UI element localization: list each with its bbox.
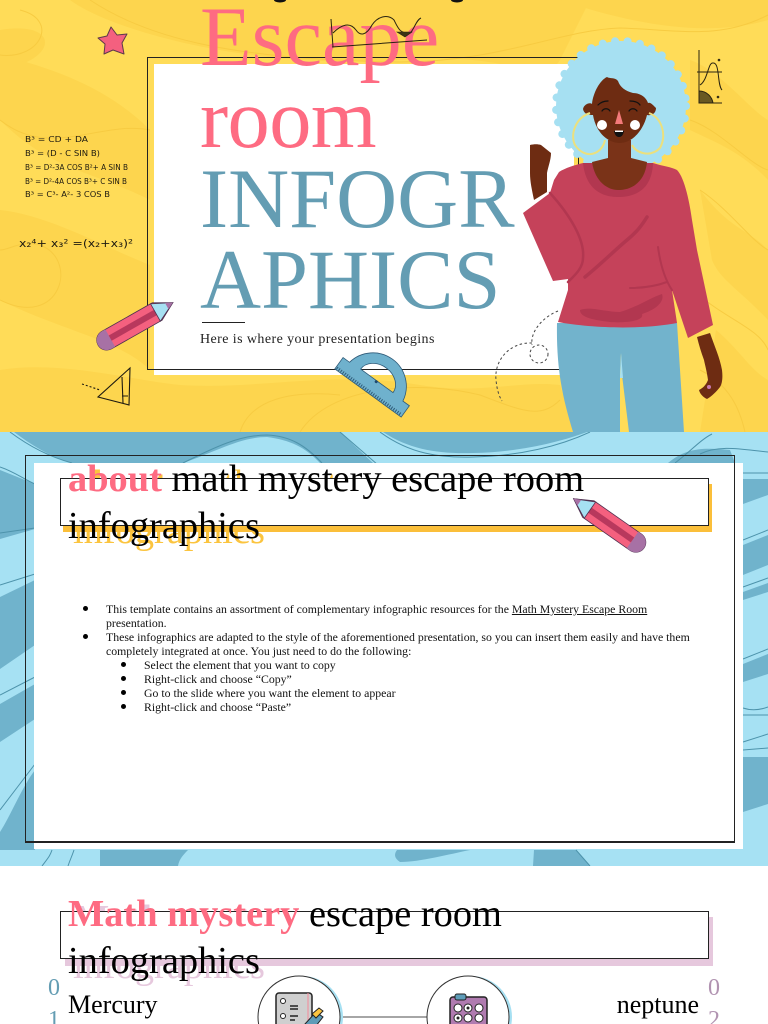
heading shadow text: infographics (73, 510, 265, 552)
pants highlight (620, 353, 623, 378)
icon: pencil (572, 498, 646, 553)
number 02 (708, 975, 720, 1024)
icon circle 2 (426, 976, 512, 1024)
heading box (60, 911, 709, 959)
formulas block: B³ = D²-4A COS B³+ C SIN B (25, 177, 127, 186)
slide 2: about (0, 432, 768, 866)
title: Escape room: room (200, 73, 376, 166)
formulas block: B³ = CD + DA (25, 135, 89, 144)
label: neptune: neptune (617, 990, 699, 1019)
heading: infographics (68, 940, 260, 982)
bullet 2: Right-click and choose “Paste” (144, 700, 291, 714)
bullet 1: presentation. (106, 616, 167, 630)
fist (530, 144, 551, 200)
slide 1: title cover (0, 0, 768, 432)
ring (707, 385, 711, 389)
icon: protractor (334, 352, 410, 418)
subtitle: Here is where your presentation begins (200, 332, 435, 347)
sweater shading (550, 193, 672, 322)
cropped descenders at top edge (274, 0, 463, 2)
face details (597, 101, 640, 137)
dashed loop (495, 310, 558, 402)
arm and hand right (697, 333, 722, 399)
blue wavy background (0, 432, 768, 866)
bullet 2: These infographics are adapted to the style of the aforementioned presentation, so you can insert them easily and have them (106, 630, 690, 644)
heading (68, 893, 502, 982)
title: Infographics (200, 153, 515, 327)
bullet 2: Right-click and choose “Copy” (144, 672, 292, 686)
earrings (573, 113, 663, 154)
number 01: 0 (48, 975, 60, 1001)
heading shadow text: about math mystery escape room (73, 463, 589, 505)
connector line (343, 1016, 426, 1018)
icon: chart over title (330, 16, 427, 48)
bullet text (83, 602, 690, 714)
number 01 (48, 975, 60, 1024)
pants (557, 323, 684, 432)
heading shadow text (73, 463, 589, 552)
bullet 2: Select the element that you want to copy (144, 658, 336, 672)
sweater (523, 163, 713, 338)
icon: pencil left (96, 302, 174, 350)
icon circle 1 (258, 976, 343, 1024)
formulas block: B³ = (D - C SIN B) (25, 149, 100, 158)
head (583, 77, 656, 143)
icon: chart right (697, 50, 722, 104)
heading shadow text: Math mystery escape room (73, 898, 507, 940)
heading shadow box (63, 484, 712, 532)
divider rule (202, 322, 245, 323)
white panel (34, 463, 743, 849)
title: Infographics: INFOGR (200, 153, 515, 246)
bullet 1 (106, 602, 716, 630)
hair (556, 41, 686, 171)
heading: infographics (68, 504, 260, 546)
formulas block: B³ = C³- A²- 3 COS B (25, 190, 110, 199)
yellow wavy background (0, 0, 768, 432)
character: woman with blue afro (523, 37, 722, 432)
heading (68, 458, 584, 546)
collar (583, 163, 653, 197)
heading shadow box (65, 917, 713, 966)
formulas block: x₂⁴+ x₃² =(x₂+x₃)² (19, 237, 133, 250)
neck (592, 140, 647, 190)
heading: Math mystery escape room (68, 893, 502, 935)
slide 3: infographic (0, 866, 768, 1024)
bullet 2 (106, 630, 716, 714)
black frame (147, 57, 579, 370)
number 02: 0 (708, 975, 720, 1001)
icon: triangle (82, 366, 131, 406)
heading shadow text (73, 898, 507, 986)
icon: star (98, 26, 128, 54)
heading: about math mystery escape room (68, 458, 584, 500)
formulas block (19, 135, 133, 250)
label: Mercury: Mercury (68, 990, 158, 1019)
white panel (154, 64, 574, 375)
bullet 2: Go to the slide where you want the element to appear (144, 686, 396, 700)
title: Infographics: APHICS (200, 234, 501, 327)
bullet 2: completely integrated at once. You just need to do the following: (106, 644, 411, 658)
outer black frame (25, 455, 735, 843)
heading box (60, 478, 709, 526)
formulas block: B³ = D²-3A COS B²+ A SIN B (25, 163, 128, 172)
heading shadow text: infographics (73, 944, 265, 986)
title: Escape room (200, 0, 439, 166)
bullet 1: This template contains an assortment of complementary infographic resources for the Math Mystery Escape Room (106, 602, 647, 616)
